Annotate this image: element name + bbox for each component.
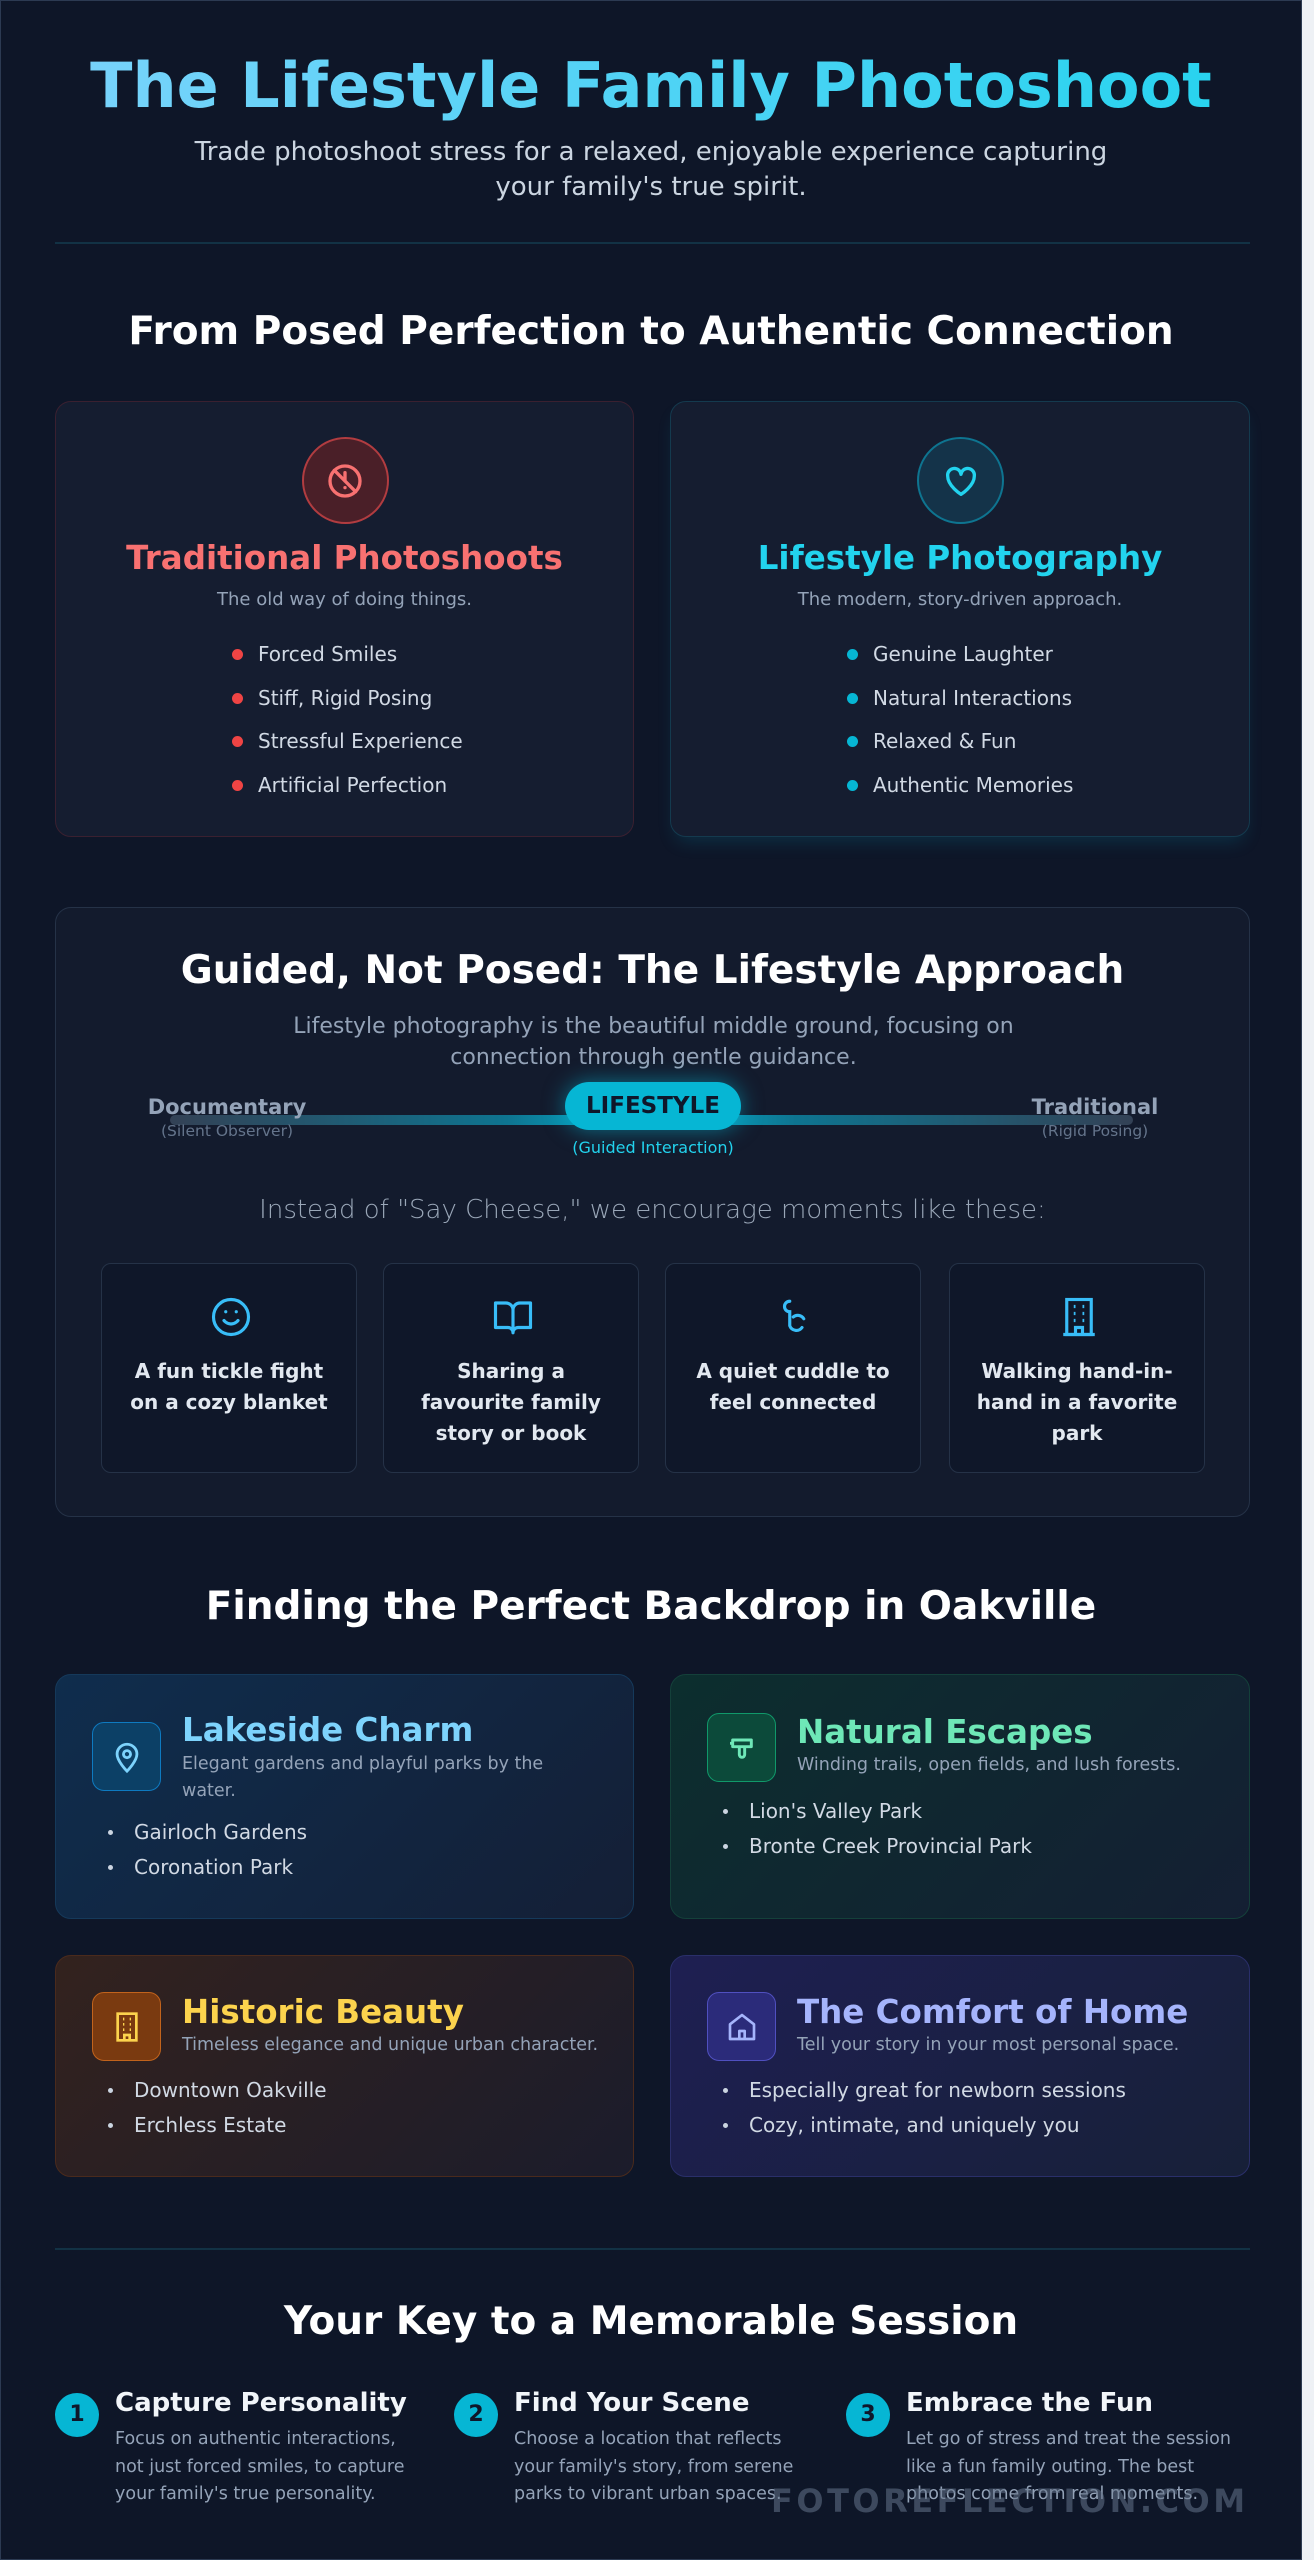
- icon: book: [494, 1301, 532, 1334]
- title: The Lifestyle Family Photoshoot: [90, 49, 1212, 122]
- card subtitle: The old way of doing things.: [217, 589, 472, 610]
- location: home: Tell your story in your most personal space.: [797, 2035, 1179, 2055]
- location: lakeside: Elegant gardens and playful parks by the: [182, 1754, 543, 1774]
- list: lifestyle traits: Genuine Laughter: [873, 642, 1053, 666]
- list: Especially great for newborn sessions: [749, 2078, 1126, 2102]
- list: [723, 2078, 1126, 2137]
- text: Capture Personality: [115, 2388, 407, 2418]
- heading: posed vs authentic: From Posed Perfection to Authentic Connection: [128, 309, 1174, 354]
- label: documentary: [148, 1095, 306, 1140]
- list: traditional traits: [232, 642, 463, 796]
- moment: cuddle: feel connected: [710, 1390, 876, 1414]
- text: Focus on authentic interactions, not just forced smiles, to capture your family's true personality.: [115, 2429, 404, 2504]
- label: traditional: (Rigid Posing): [1042, 1122, 1148, 1140]
- icon: building: [1063, 1298, 1095, 1336]
- pill: lifestyle: [565, 1082, 741, 1130]
- label: traditional: Traditional: [1032, 1095, 1158, 1119]
- panel: guided approach: [55, 907, 1250, 1517]
- pill caption: (Guided Interaction): [572, 1138, 734, 1157]
- card subtitle: The modern, story-driven approach.: [798, 589, 1122, 610]
- list: Lion's Valley Park: [749, 1799, 922, 1823]
- list: Erchless Estate: [134, 2113, 286, 2137]
- location: historic: Timeless elegance and unique urban character.: [182, 2035, 598, 2055]
- text: Let go of stress and treat the session like a fun family outing. The best photos come from real moments.: [906, 2429, 1231, 2504]
- moment: walking: park: [1052, 1421, 1102, 1445]
- list: traditional traits: Stressful Experience: [258, 729, 463, 753]
- list: Coronation Park: [134, 1855, 293, 1879]
- moments intro: Instead of "Say Cheese," we encourage moments like these:: [259, 1195, 1046, 1225]
- list: lifestyle traits: Authentic Memories: [873, 772, 1073, 796]
- watermark: FOTOREFLECTION.COM: [771, 2482, 1249, 2520]
- moment: tickle fight: A fun tickle fight: [135, 1359, 323, 1383]
- list: traditional traits: Artificial Perfection: [258, 772, 447, 796]
- label: documentary: Documentary: [148, 1095, 306, 1119]
- list: lifestyle traits: Natural Interactions: [873, 686, 1072, 710]
- text: Choose a location that reflects your family's story, from serene parks to vibrant urban spaces.: [514, 2429, 793, 2504]
- list: lifestyle traits: Relaxed & Fun: [873, 729, 1016, 753]
- list: lifestyle traits: [847, 642, 1073, 796]
- list: [108, 2078, 327, 2137]
- location: home: [670, 1955, 1250, 2177]
- moment: story: story or book: [436, 1421, 586, 1445]
- list: traditional traits: Forced Smiles: [258, 642, 397, 666]
- spectrum bar: [170, 1115, 1133, 1125]
- list: Cozy, intimate, and uniquely you: [749, 2113, 1080, 2137]
- heading: key to session: Your Key to a Memorable Session: [284, 2299, 1018, 2344]
- step 1: [55, 2388, 407, 2504]
- text: Embrace the Fun: [906, 2388, 1153, 2418]
- location: historic: [55, 1955, 634, 2177]
- moment: tickle fight: [101, 1263, 357, 1473]
- text: 1: [69, 2402, 85, 2427]
- location: natural: [670, 1674, 1250, 1919]
- icon: baby: [782, 1300, 806, 1332]
- subtitle: Trade photoshoot stress for a relaxed, enjoyable experience capturing your family's true spirit.: [195, 137, 1107, 202]
- location: natural: Winding trails, open fields, and lush forests.: [797, 1755, 1181, 1775]
- icon: house: [707, 1992, 776, 2061]
- list: Bronte Creek Provincial Park: [749, 1834, 1032, 1858]
- moment: tickle fight: on a cozy blanket: [130, 1390, 328, 1414]
- moment: cuddle: A quiet cuddle to: [696, 1359, 890, 1383]
- card title: Traditional Photoshoots: [126, 539, 563, 577]
- list: Gairloch Gardens: [134, 1820, 307, 1844]
- step 2: [454, 2388, 793, 2504]
- location: historic: Historic Beauty: [182, 1993, 464, 2031]
- icon: signpost: [707, 1713, 776, 1782]
- panel: lifestyle photography: [670, 401, 1250, 837]
- moment: walking: hand in a favorite: [977, 1390, 1177, 1414]
- title: [1, 41, 1301, 131]
- moment: story: [383, 1263, 639, 1473]
- label: documentary: (Silent Observer): [161, 1122, 293, 1140]
- moment: story: favourite family: [421, 1390, 601, 1414]
- icon: smile: [212, 1298, 250, 1336]
- step 3: [846, 2388, 1231, 2504]
- moment: cuddle: [665, 1263, 921, 1473]
- list: [108, 1820, 307, 1879]
- heading: backdrops: Finding the Perfect Backdrop in Oakville: [206, 1584, 1096, 1629]
- list: traditional traits: Stiff, Rigid Posing: [258, 686, 432, 710]
- card title: Lifestyle Photography: [758, 539, 1162, 577]
- text: 3: [860, 2402, 876, 2427]
- text: 2: [468, 2402, 484, 2427]
- moment: walking: [949, 1263, 1205, 1473]
- location: natural: Natural Escapes: [797, 1713, 1093, 1751]
- location: lakeside: water.: [182, 1781, 236, 1801]
- icon: pin: [92, 1722, 161, 1791]
- heading: Guided, Not Posed: The Lifestyle Approach: [181, 948, 1124, 993]
- icon: no-smile: [302, 437, 388, 524]
- pill: lifestyle: LIFESTYLE: [586, 1093, 720, 1119]
- icon: heart: [917, 437, 1004, 524]
- location: lakeside: [55, 1674, 634, 1919]
- list: Downtown Oakville: [134, 2078, 327, 2102]
- list: [723, 1799, 1032, 1858]
- icon: building: [92, 1992, 161, 2061]
- location: home: The Comfort of Home: [797, 1993, 1188, 2031]
- label: traditional: [1032, 1095, 1158, 1140]
- text: Find Your Scene: [514, 2388, 749, 2418]
- location: lakeside: Lakeside Charm: [182, 1711, 473, 1749]
- panel: traditional photoshoots: [55, 401, 634, 837]
- moment: walking: Walking hand-in-: [981, 1359, 1173, 1383]
- description: Lifestyle photography is the beautiful middle ground, focusing on connection through gentle guidance.: [293, 1014, 1014, 1070]
- moment: story: Sharing a: [457, 1359, 565, 1383]
